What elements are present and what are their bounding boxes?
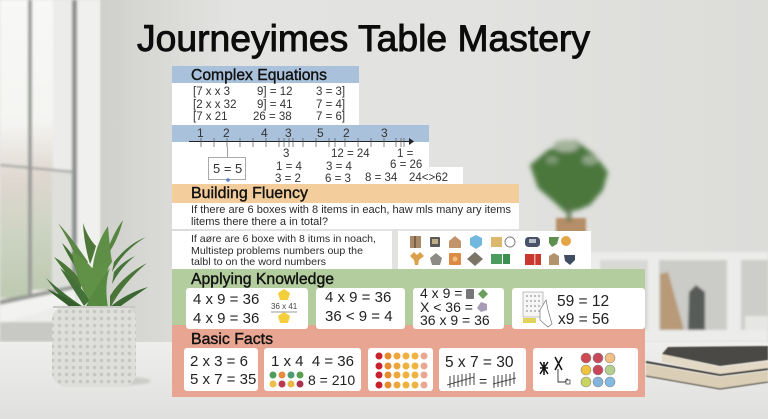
equations text: 9] = 41 (257, 99, 292, 111)
number line equations: 3 = 4 (326, 161, 353, 173)
number line equations: 12 = 24 (331, 148, 370, 160)
window (0, 0, 105, 345)
panel: multistep problems: talbl to on the word numbers (191, 256, 326, 268)
card: simple equations (184, 348, 258, 391)
number line equations: 1 = (397, 148, 414, 160)
icons row 1 (410, 235, 571, 249)
chart: number line axis: 1 (197, 126, 204, 140)
word problem text (191, 204, 512, 228)
panel: multistep problems (172, 231, 392, 269)
card: simple equations: 5 x 7 = 35 (190, 371, 256, 388)
equations text: [2 x x 32 (193, 99, 236, 111)
equations text: 3 = 3] (316, 86, 345, 98)
word problem text: If there are 6 boxes with 8 items in each, haw mls many ary items (191, 204, 512, 216)
number line equations: 3 (283, 148, 289, 160)
heading: building fluency (172, 184, 519, 203)
card: crossed figures and colour dots (533, 348, 638, 391)
number line equations: 24<>62 (409, 172, 448, 184)
card: equations with icons: X < 36 = (420, 299, 473, 315)
chart: number line axis: 4 (261, 126, 268, 140)
equations text: 26 = 38 (253, 111, 292, 123)
card: tally marks (439, 348, 526, 391)
chart: number line axis: 3 (285, 126, 292, 140)
panel: multistep problems: If aøre are 6 boxe with 8 itıms in noach, (191, 233, 376, 245)
chart: number line axis: 3 (381, 126, 388, 140)
icon: blurred plant on shelf (530, 140, 608, 234)
equations text (193, 86, 345, 123)
card: dot array (368, 348, 433, 391)
number line equations: 3 = 2 (275, 173, 301, 185)
equations text: [7 x 21 (193, 111, 228, 123)
panel: number line (172, 125, 463, 185)
heading: building fluency: Building Fluency (191, 185, 308, 202)
card: equations with dots (264, 348, 361, 391)
callout: 5 = 5 box: 5 = 5 (213, 161, 242, 176)
title: Journeyimes Table Mastery (137, 18, 590, 59)
shelf (590, 252, 768, 342)
table top (0, 342, 768, 419)
equations text: 7 = 6] (316, 111, 345, 123)
chart: number line axis: 2 (343, 126, 350, 140)
heading: basic facts: Basic Facts (191, 331, 273, 348)
panel: object icons (398, 231, 591, 269)
card: equations: 4 x 9 = 36 (325, 289, 391, 306)
card: equations with icons: 4 x 9 = (420, 285, 462, 301)
card: equations (316, 288, 405, 329)
panel: building fluency (172, 184, 519, 229)
number line equations (275, 148, 448, 185)
card: equations: 36 < 9 = 4 (325, 308, 393, 325)
infographic pyramid (172, 66, 645, 397)
card: equations with pentagons (186, 288, 308, 329)
card: equations with dots: 1 x 4 4 = 36 (271, 353, 354, 370)
heading: complex equations: Complex Equations (191, 67, 327, 84)
panel: basic facts (172, 325, 645, 397)
equations text: [7 x x 3 (193, 86, 230, 98)
icons row 2 (410, 252, 575, 266)
panel: multistep problems: Multistep problems numbers oup the (191, 245, 363, 257)
card: simple equations: 2 x 3 = 6 (190, 353, 248, 370)
card: hand and table: x9 = 56 (558, 311, 609, 328)
panel: complex equations (172, 66, 359, 126)
number line equations: 6 = 26 (390, 159, 422, 171)
heading: applying knowledge: Applying Knowledge (191, 271, 334, 288)
callout: 5 = 5 box (208, 147, 246, 182)
icon: stacked books (646, 346, 768, 389)
card: equations with pentagons: 4 x 9 = 36 (193, 310, 259, 327)
word problem text: litems there there a in total? (191, 216, 328, 228)
card: equations with dots: 8 = 210 (308, 372, 355, 388)
equations text: 7 = 4] (316, 99, 345, 111)
chart: number line axis (189, 126, 414, 147)
chart: number line axis: 2 (223, 126, 230, 140)
card: hand and table (512, 288, 645, 329)
card: equations with pentagons: 4 x 9 = 36 (193, 291, 259, 308)
card: tally marks: 5 x 7 = 30 (445, 354, 514, 371)
icon: aloe plant in knitted pot (46, 220, 151, 387)
chart: number line axis: 5 (317, 126, 324, 140)
equations text: 9] = 12 (257, 86, 292, 98)
card: hand and table: 59 = 12 (557, 293, 609, 310)
card: equations with icons: 36 x 9 = 36 (420, 312, 490, 328)
panel: applying knowledge (172, 269, 645, 329)
number line equations: 1 = 4 (276, 161, 303, 173)
number line equations: 8 = 34 (365, 172, 398, 184)
card: equations with pentagons: 36 x 41 (271, 302, 298, 311)
card: equations with icons (413, 285, 504, 329)
number line equations: 6 = 3 (325, 173, 351, 185)
card: tally marks: = (479, 373, 487, 389)
